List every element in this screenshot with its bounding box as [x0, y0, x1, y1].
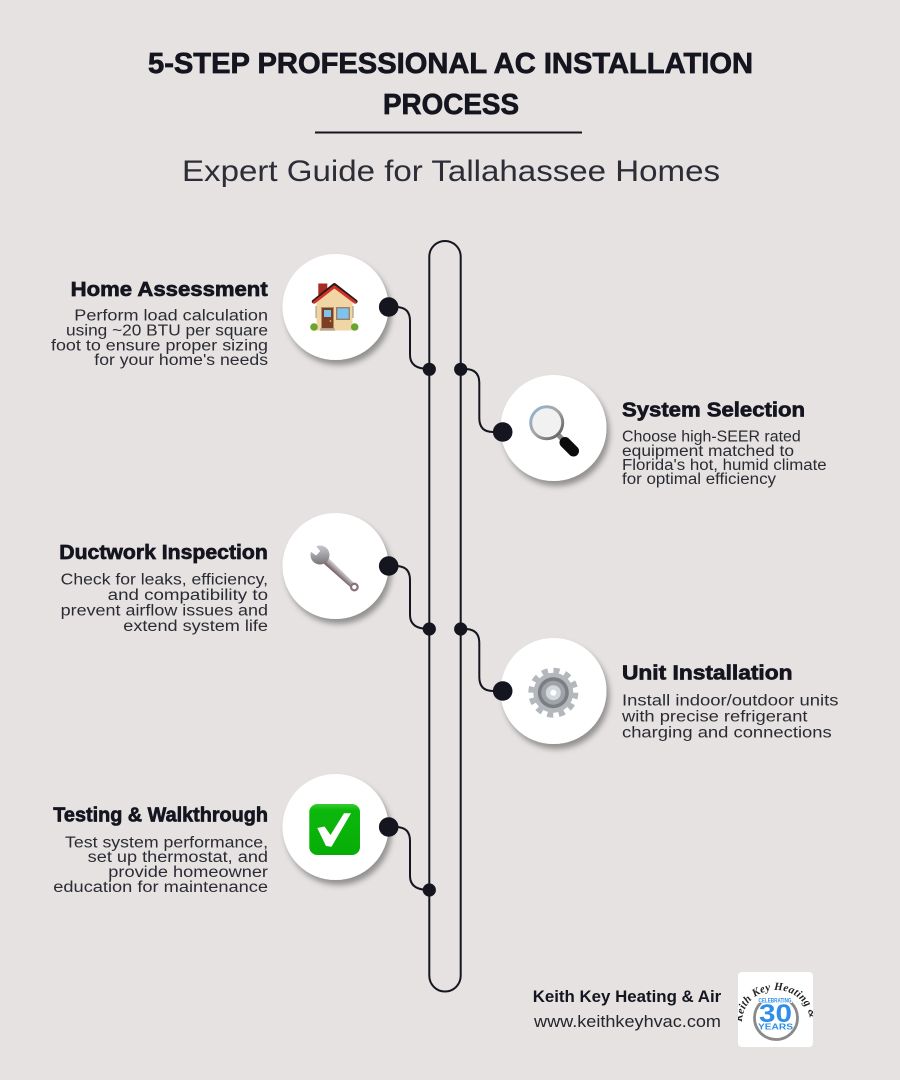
- description 1: [51, 308, 268, 369]
- icon circle 5: [282, 774, 388, 880]
- node dot 1 large: [379, 297, 399, 317]
- logo: Keith Key Heating & Air: [738, 982, 813, 1022]
- timeline track: [429, 241, 461, 992]
- node dot 5 large: [379, 817, 399, 837]
- connector 1: [389, 307, 429, 369]
- step 2: system selection: [454, 363, 827, 488]
- description 3: and compatibility to: [108, 587, 268, 604]
- description 5: set up thermostat, and: [88, 849, 268, 866]
- node dot 4 small: [454, 622, 467, 636]
- description 4: Install indoor/outdoor units: [622, 693, 839, 710]
- step 1: home assessment: [51, 254, 436, 376]
- icon: house: [310, 284, 359, 331]
- header: [148, 48, 753, 188]
- title: PROCESS: [383, 89, 519, 121]
- heading 1: Home Assessment: [71, 278, 268, 301]
- footer: [534, 972, 813, 1047]
- title: 5-STEP PROFESSIONAL AC INSTALLATION: [148, 48, 753, 80]
- description 1: using ~20 BTU per square: [66, 322, 268, 340]
- connector 5: [389, 827, 429, 890]
- description 4: [621, 693, 839, 742]
- node dot 3 large: [379, 556, 399, 576]
- description 3: [61, 571, 268, 635]
- heading 3: Ductwork Inspection: [59, 541, 268, 564]
- icon circle 2: [500, 375, 606, 481]
- connector 4: [461, 629, 503, 691]
- description 3: Check for leaks, efficiency,: [61, 571, 268, 588]
- logo: 30: [759, 1000, 792, 1028]
- description 1: for your home's needs: [94, 352, 268, 369]
- step 5: testing and walkthrough: [53, 774, 436, 897]
- description 1: Perform load calculation: [74, 308, 268, 325]
- connector 2: [461, 369, 503, 432]
- icon: check mark: [309, 804, 360, 855]
- node dot 1 small: [423, 363, 436, 376]
- heading 4: Unit Installation: [622, 662, 792, 684]
- description 3: prevent airflow issues and: [61, 602, 268, 619]
- node dot 2 large: [493, 422, 512, 442]
- description 2: for optimal efficiency: [622, 471, 776, 488]
- description 2: Florida's hot, humid climate: [622, 457, 827, 474]
- step 4: unit installation: [454, 622, 839, 744]
- icon: gear: [531, 671, 575, 715]
- heading 5: Testing & Walkthrough: [53, 803, 268, 826]
- description 1: foot to ensure proper sizing: [51, 337, 268, 354]
- title: [148, 48, 753, 121]
- node dot 2 small: [454, 363, 467, 376]
- description 3: extend system life: [123, 618, 268, 635]
- icon circle 3: [282, 513, 388, 619]
- description 2: [622, 429, 827, 488]
- logo: [738, 972, 813, 1047]
- description 5: education for maintenance: [53, 879, 268, 896]
- description 2: Choose high-SEER rated: [622, 429, 801, 446]
- title underline: [315, 132, 582, 134]
- description 2: equipment matched to: [622, 443, 794, 460]
- step 3: ductwork inspection: [59, 513, 436, 636]
- website: www.keithkeyhvac.com: [533, 1012, 721, 1031]
- logo: CELEBRATING: [758, 997, 792, 1004]
- icon circle 4: [500, 638, 606, 744]
- logo: YEARS: [758, 1022, 793, 1032]
- node dot 3 small: [423, 622, 436, 636]
- icon: wrench: [304, 539, 364, 597]
- company name: Keith Key Heating & Air: [533, 987, 722, 1006]
- node dot 5 small: [423, 883, 436, 897]
- subtitle: Expert Guide for Tallahassee Homes: [182, 155, 720, 188]
- description 4: charging and connections: [622, 725, 832, 742]
- description 5: Test system performance,: [65, 834, 268, 851]
- connector 3: [389, 566, 429, 629]
- description 5: [53, 834, 268, 896]
- icon circle 1: [282, 254, 388, 360]
- heading 2: System Selection: [622, 399, 805, 422]
- icon: magnifying glass: [531, 407, 574, 451]
- node dot 4 large: [493, 681, 512, 701]
- description 4: with precise refrigerant: [621, 709, 808, 726]
- description 5: provide homeowner: [108, 864, 268, 881]
